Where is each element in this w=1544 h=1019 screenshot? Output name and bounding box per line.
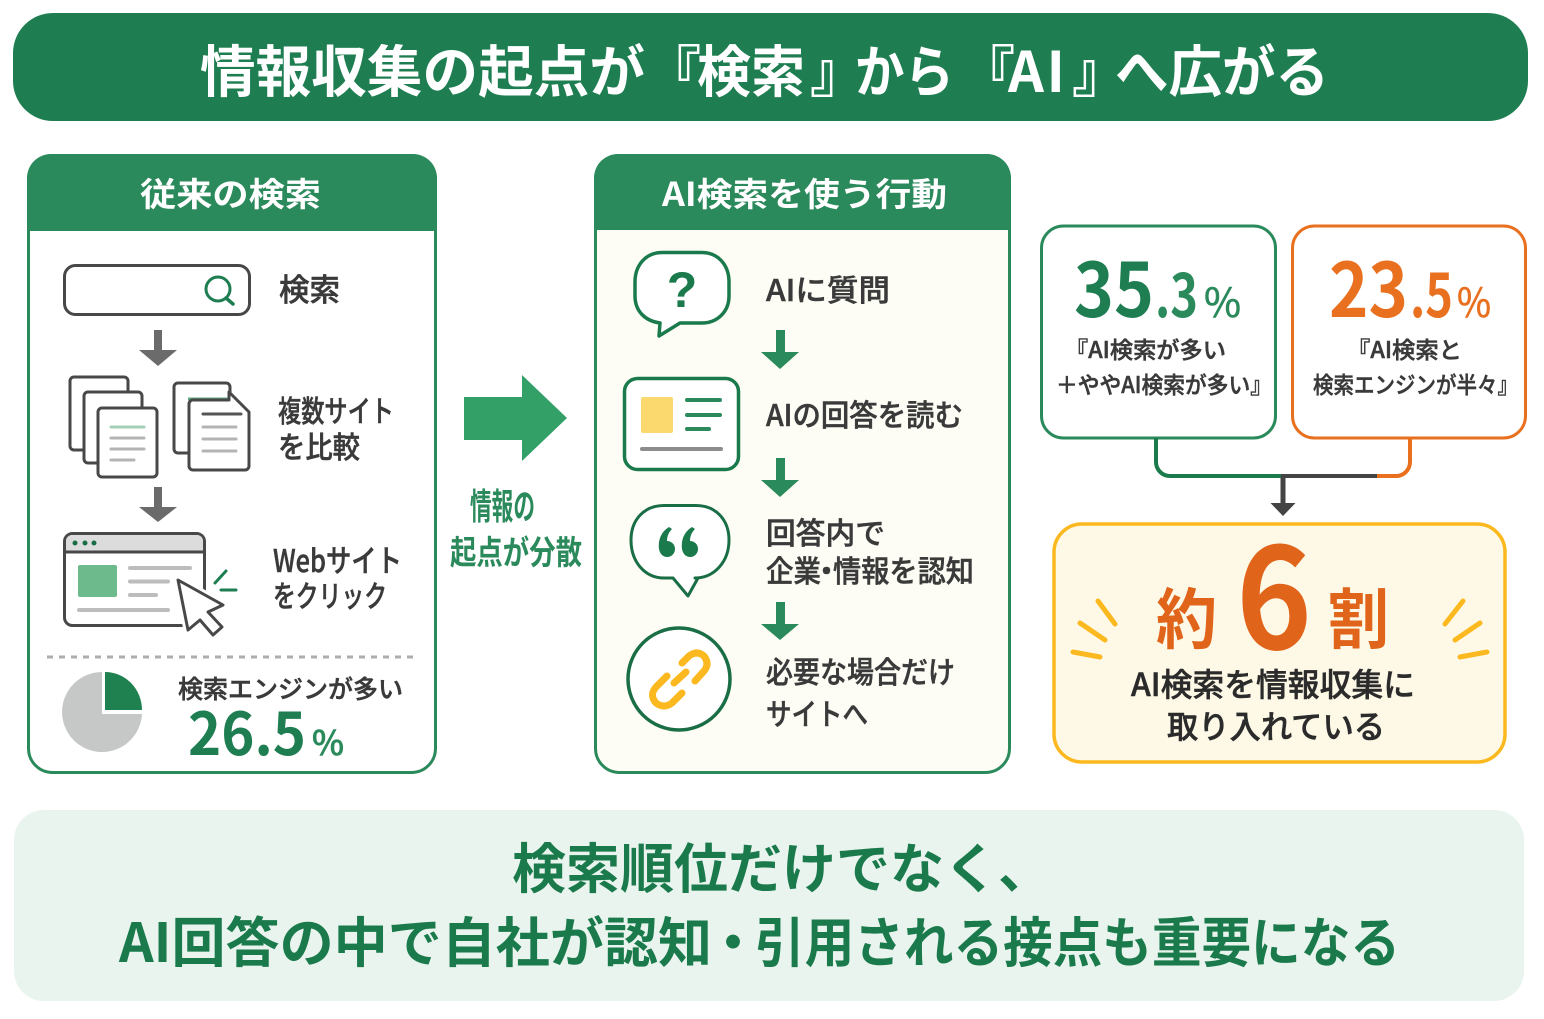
label: only go to site when needed <box>766 648 955 734</box>
label: recognise company in answer: 回答内で <box>766 509 885 553</box>
panel: AI search behaviour <box>594 154 1011 772</box>
takeaway banner: 検索順位だけでなく、 <box>512 825 1052 904</box>
label: start point disperses <box>450 478 582 574</box>
heading: traditional search: 従来の検索 <box>140 168 321 216</box>
title banner: 情報収集の起点が <box>200 28 645 109</box>
stat: 26.5%: % <box>312 716 344 765</box>
title banner: 『 <box>959 28 1015 109</box>
heading: AI search behaviour: AI検索を使う行動 <box>661 168 947 216</box>
label: compare multiple sites: を比較 <box>278 423 360 467</box>
arrow: shift to AI search <box>464 375 567 461</box>
title banner: 検索 <box>697 28 805 109</box>
arrow: search to compare <box>139 330 177 366</box>
title banner: へ広がる <box>1115 28 1329 109</box>
stat card: 35.3%: .3 <box>1155 248 1198 335</box>
icon: link circle <box>628 628 730 730</box>
panel: traditional search <box>27 154 437 772</box>
arrow: read to recognise <box>761 458 799 497</box>
label: read AI answer: AIの回答を読む <box>766 391 963 435</box>
takeaway banner: 引用される接点も重要になる <box>755 899 1400 978</box>
label: click website: Webサイト <box>273 536 402 581</box>
stat card: 35.3%: % <box>1204 271 1241 329</box>
decoration: burst lines <box>1073 601 1487 657</box>
icon: browser with cursor <box>64 534 236 635</box>
icon: question bubble <box>635 252 729 336</box>
callout: about 60 percent: 6 <box>1236 488 1312 690</box>
label: search: 検索 <box>279 265 340 310</box>
icon: second document set <box>174 383 249 470</box>
label: ask AI: AIに質問 <box>766 266 890 310</box>
label: start point disperses: 起点が分散 <box>450 526 582 574</box>
label: compare multiple sites <box>278 387 394 467</box>
icon: question bubble: ? <box>667 262 697 318</box>
takeaway banner <box>14 810 1524 1001</box>
label: search engine majority: 検索エンジンが多い <box>178 670 403 706</box>
icon: answer card <box>624 378 738 470</box>
icon: search box <box>64 266 250 314</box>
callout: about 60 percent: 割 <box>1328 567 1389 663</box>
stat card: 35.3%: ＋ややAI検索が多い』 <box>1056 366 1272 400</box>
label: compare multiple sites: 複数サイト <box>278 387 394 431</box>
label: start point disperses: 情報の <box>470 478 535 530</box>
label: only go to site when needed: 必要な場合だけ <box>766 648 955 692</box>
takeaway banner: ・ <box>706 899 760 978</box>
callout: about 60 percent: 約 <box>1156 567 1217 663</box>
label: recognise company in answer: 情報を認知 <box>833 547 974 591</box>
label: only go to site when needed: サイトへ <box>766 690 868 734</box>
label: recognise company in answer <box>766 509 974 591</box>
stat: 26.5%: 26.5 <box>188 687 306 772</box>
icon: stacked documents <box>70 377 157 477</box>
stat card: 35.3%: 『AI検索が多い <box>1065 331 1226 365</box>
stat card: 23.5%: 『AI検索と <box>1347 331 1462 365</box>
stat card: 23.5%: 検索エンジンが半々』 <box>1313 366 1518 400</box>
title banner: から <box>855 28 954 109</box>
label: click website: をクリック <box>273 572 387 616</box>
arrow: compare to click <box>139 487 177 522</box>
callout: about 60 percent: 取り入れている <box>1167 702 1385 748</box>
stat card: 35.3% <box>1042 226 1276 438</box>
arrow: ask to read <box>761 330 799 369</box>
arrow: recognise to site <box>761 602 799 640</box>
stat card: 23.5% <box>1292 226 1526 438</box>
pie chart: search engine share <box>62 672 142 752</box>
connector: stats to conclusion <box>1156 438 1410 516</box>
stat card: 35.3%: 35 <box>1074 230 1154 339</box>
title banner: 『 <box>645 28 701 109</box>
title banner: AI <box>1007 28 1065 109</box>
label: recognise company in answer: 企業 <box>766 547 821 591</box>
label: click website <box>273 536 402 616</box>
stat card: 23.5%: % <box>1457 271 1491 329</box>
takeaway banner: AI回答の中で自社が認知 <box>118 899 712 978</box>
title banner <box>13 13 1528 121</box>
title banner: 』 <box>1072 28 1128 109</box>
callout: about 60 percent: AI検索を情報収集に <box>1131 660 1415 706</box>
label: recognise company in answer: ・ <box>812 547 842 591</box>
callout: about 60 percent <box>1054 488 1505 762</box>
icon: quote bubble <box>631 506 729 596</box>
title banner: 』 <box>810 28 866 109</box>
stat card: 23.5%: 23 <box>1329 230 1408 339</box>
stat card: 23.5%: .5 <box>1410 248 1453 335</box>
